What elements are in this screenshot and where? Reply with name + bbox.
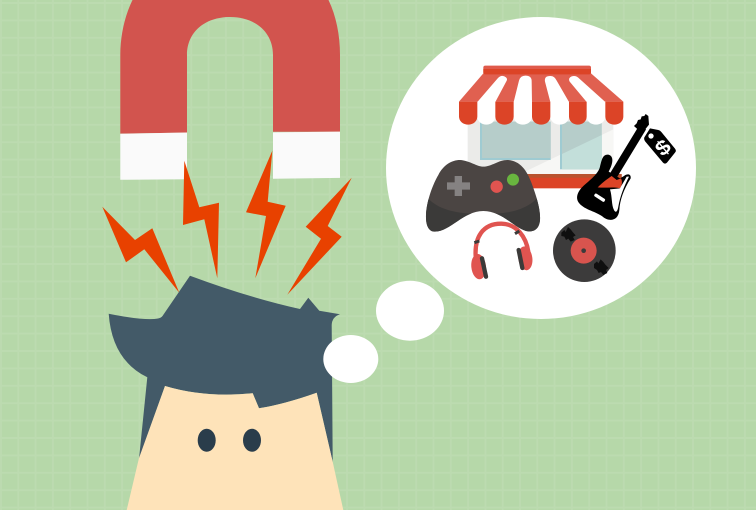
icon: game controller	[423, 160, 543, 237]
small thought bubble	[323, 335, 378, 383]
large thought bubble	[386, 17, 696, 319]
lightning bolts	[102, 151, 352, 295]
red button	[490, 180, 503, 193]
price tag dollar sign: $	[650, 134, 676, 161]
icon: vinyl record	[553, 219, 616, 282]
face	[127, 386, 343, 510]
guitar red pickguard	[598, 176, 622, 188]
character head	[109, 276, 343, 510]
d-pad	[447, 176, 470, 196]
medium thought bubble	[376, 281, 444, 341]
awning	[459, 66, 623, 125]
hair	[109, 276, 340, 462]
magnet left tip	[120, 132, 187, 180]
magnet right tip	[273, 132, 340, 179]
icon: headphones	[470, 224, 534, 280]
right eye	[243, 429, 261, 452]
guitar white pickguard	[610, 177, 629, 212]
shop windows	[480, 122, 602, 169]
icon: shop	[459, 66, 623, 188]
icon: electric guitar with price tag	[577, 114, 676, 220]
green button	[507, 174, 519, 186]
thought bubble icons	[423, 66, 676, 282]
bolt 1	[102, 207, 179, 293]
bolt 4	[287, 178, 352, 295]
magnet	[120, 0, 340, 180]
left eye	[198, 429, 216, 452]
shop base	[468, 174, 622, 188]
bolt 3	[246, 151, 286, 278]
bolt 2	[183, 161, 219, 278]
